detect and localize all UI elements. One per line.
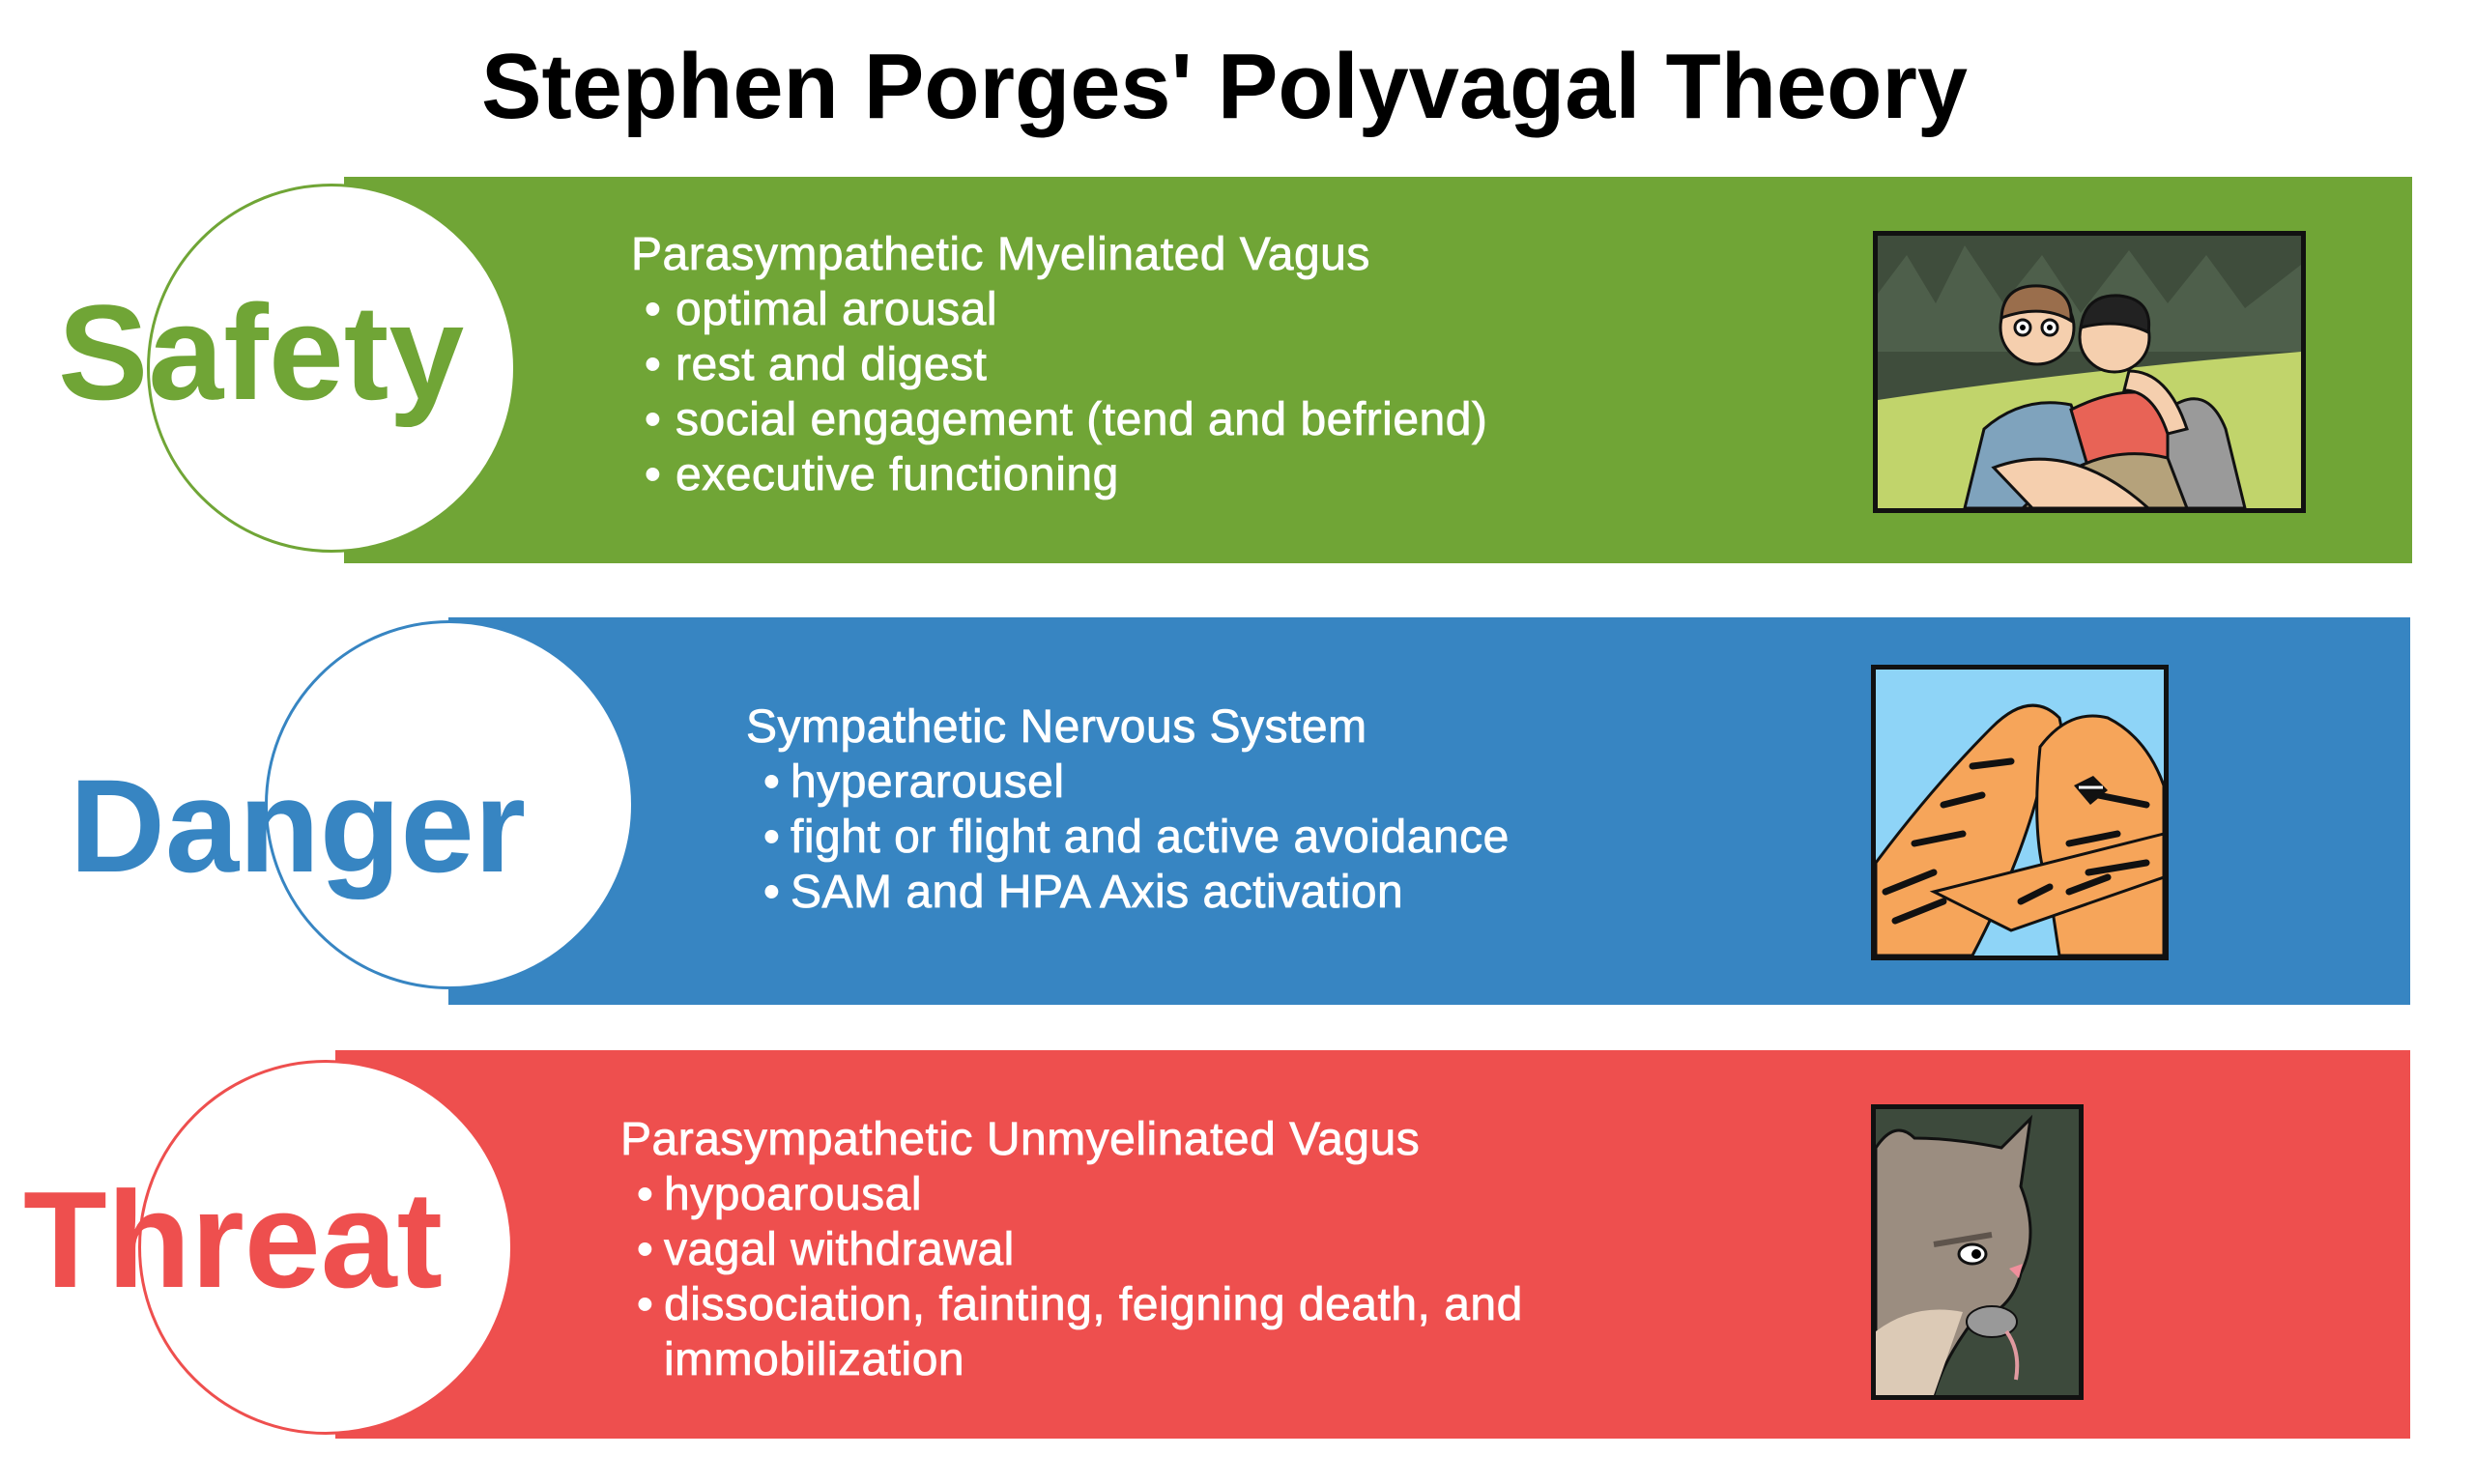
threat text block: •	[637, 1279, 653, 1330]
illustration: two friends on grass	[1873, 231, 2306, 513]
danger text block: •	[763, 812, 780, 863]
danger text block: •	[763, 756, 780, 808]
threat text block: •	[637, 1224, 653, 1275]
threat label: Threat	[23, 1163, 443, 1317]
red band	[335, 1050, 2410, 1439]
safety text block: •	[645, 449, 661, 500]
danger label: Danger	[70, 753, 526, 900]
illustration: cat with mouse	[1871, 1104, 2084, 1400]
danger text block: •	[763, 867, 780, 918]
safety text block: •	[645, 394, 661, 445]
threat text block: hypoarousal	[664, 1169, 922, 1220]
safety text block: optimal arousal	[676, 284, 997, 335]
panel: threat	[23, 1050, 2410, 1439]
danger text block: SAM and HPA Axis activation	[791, 867, 1403, 918]
danger text block: hyperarousel	[791, 756, 1065, 808]
panel: danger	[70, 617, 2410, 1005]
safety text block: •	[645, 284, 661, 335]
threat text block: vagal withdrawal	[664, 1224, 1015, 1275]
blue band	[448, 617, 2410, 1005]
threat text block: •	[637, 1169, 653, 1220]
title: Stephen Porges' Polyvagal Theory	[481, 35, 1968, 138]
danger text block: Sympathetic Nervous System	[746, 701, 1367, 753]
safety text block: rest and digest	[676, 339, 987, 390]
safety label: Safety	[58, 276, 464, 428]
threat text block: dissociation, fainting, feigning death, and	[664, 1279, 1523, 1330]
green band	[344, 177, 2412, 563]
threat text block: immobilization	[664, 1334, 964, 1385]
safety circle	[147, 184, 516, 553]
panel: safety	[58, 177, 2412, 563]
threat text block: Parasympathetic Unmyelinated Vagus	[620, 1114, 1420, 1165]
safety text block: social engagement (tend and befriend)	[676, 394, 1487, 445]
danger text block: fight or flight and active avoidance	[791, 812, 1510, 863]
danger circle	[265, 620, 634, 989]
safety text block: Parasympathetic Myelinated Vagus	[631, 229, 1370, 280]
danger text block	[746, 701, 1510, 918]
threat circle	[138, 1060, 513, 1435]
safety text block: •	[645, 339, 661, 390]
threat text block	[620, 1114, 1523, 1385]
illustration: fighting tigers	[1871, 665, 2169, 960]
safety text block	[631, 229, 1487, 500]
safety text block: executive functioning	[676, 449, 1119, 500]
